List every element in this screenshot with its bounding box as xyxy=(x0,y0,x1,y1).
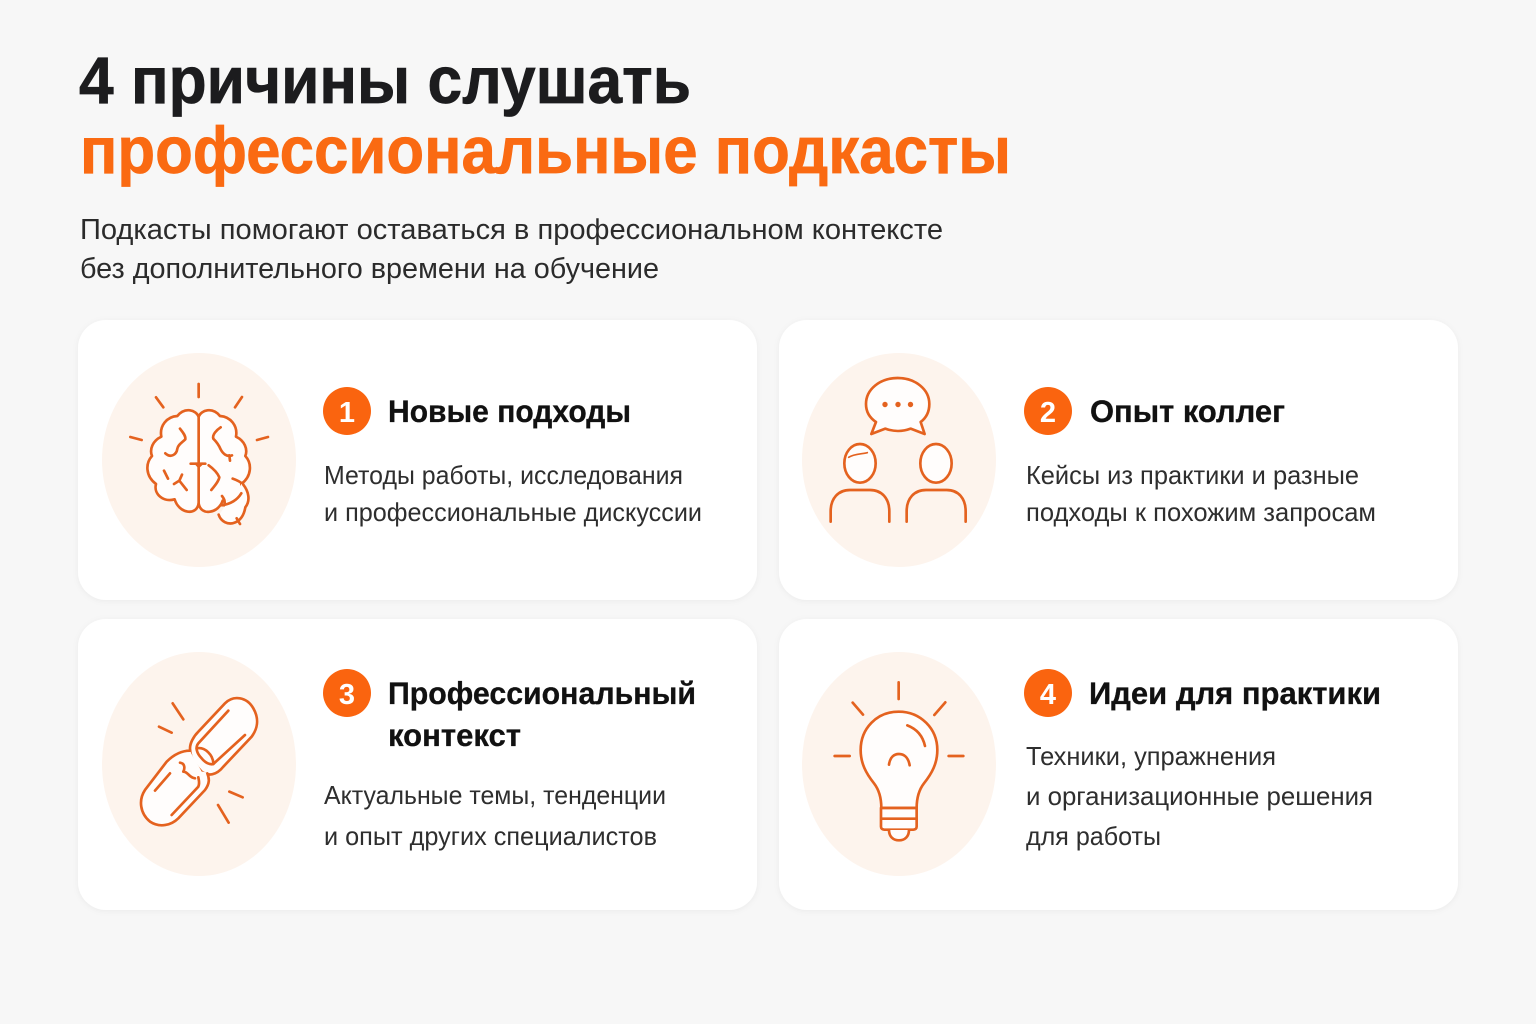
icon: light bulb xyxy=(802,652,996,876)
description 1: и профессиональные дискуссии xyxy=(324,497,702,527)
description 2 xyxy=(1026,460,1376,527)
panel: card 3 professional context xyxy=(78,619,757,910)
icon: brain xyxy=(102,353,296,567)
number badge 4: 4 xyxy=(1040,679,1056,711)
icon: two people with speech bubble xyxy=(802,353,996,567)
heading 2: Опыт коллег xyxy=(1090,393,1285,429)
subtitle: Подкасты помогают оставаться в профессиональном контексте xyxy=(80,214,943,246)
number badge 4 xyxy=(1024,669,1072,717)
subtitle xyxy=(80,214,943,285)
heading 1: Новые подходы xyxy=(388,393,631,429)
panel: card 2 colleagues' experience xyxy=(779,320,1458,600)
description 2: Кейсы из практики и разные xyxy=(1026,460,1359,490)
panel: card 4 ideas for practice xyxy=(779,619,1458,910)
subtitle: без дополнительного времени на обучение xyxy=(80,253,659,285)
number badge 2: 2 xyxy=(1040,397,1056,429)
title xyxy=(79,43,1011,187)
title: 4 причины слушать xyxy=(79,43,691,117)
heading 3: контекст xyxy=(388,717,521,753)
description 4: и организационные решения xyxy=(1026,781,1373,811)
number badge 1 xyxy=(323,387,371,435)
description 4 xyxy=(1026,741,1373,851)
number badge 2 xyxy=(1024,387,1072,435)
description 3 xyxy=(324,780,666,851)
description 2: подходы к похожим запросам xyxy=(1026,497,1376,527)
heading 3: Профессиональный xyxy=(388,675,696,711)
description 3: Актуальные темы, тенденции xyxy=(324,780,666,810)
description 4: Техники, упражнения xyxy=(1026,741,1276,771)
heading 3 xyxy=(388,675,696,753)
number badge 3 xyxy=(323,669,371,717)
description 3: и опыт других специалистов xyxy=(324,821,657,851)
description 1 xyxy=(324,460,702,527)
number badge 3: 3 xyxy=(339,679,355,711)
description 4: для работы xyxy=(1026,821,1161,851)
description 1: Методы работы, исследования xyxy=(324,460,683,490)
title: профессиональные подкасты xyxy=(80,113,1011,187)
icon: chain link xyxy=(102,652,296,876)
number badge 1: 1 xyxy=(339,397,355,429)
heading 4: Идеи для практики xyxy=(1089,675,1381,711)
panel: card 1 new approaches xyxy=(78,320,757,600)
